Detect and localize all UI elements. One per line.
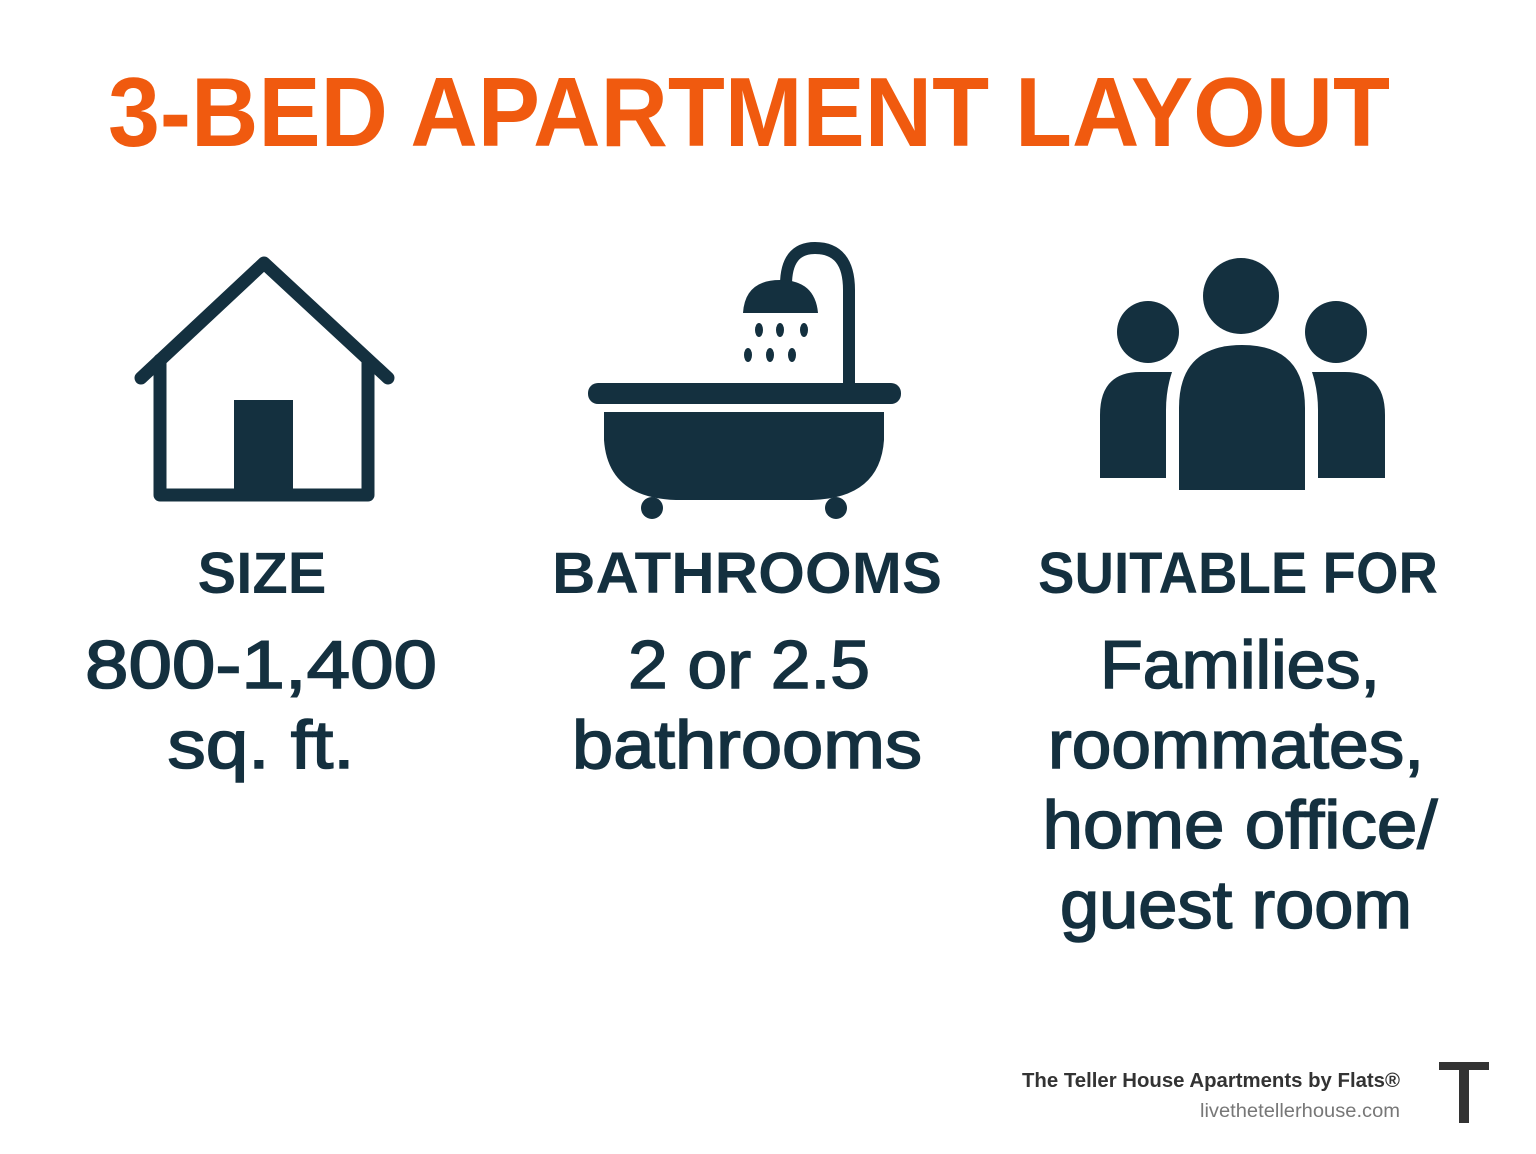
column: bathrooms (552, 541, 942, 783)
column: bathrooms: bathrooms (572, 707, 922, 783)
column: size: 800-1,400 (85, 627, 437, 703)
column: suitable for: SUITABLE FOR (1038, 541, 1438, 606)
column: suitable for: guest room (1060, 867, 1412, 943)
column: bathrooms: BATHROOMS (552, 541, 942, 606)
column: size: SIZE (198, 541, 326, 606)
icon: bathtub (588, 248, 901, 519)
icon: people (1100, 258, 1385, 490)
title: 3-BED APARTMENT LAYOUT (108, 57, 1390, 167)
column: suitable for: Families, (1100, 627, 1380, 703)
footer text: The Teller House Apartments by Flats® (1022, 1070, 1400, 1092)
column: bathrooms: 2 or 2.5 (628, 627, 870, 703)
column: size (85, 541, 437, 783)
column: suitable for: roommates, (1048, 707, 1424, 783)
column: size: sq. ft. (168, 707, 354, 783)
column: suitable for: home office/ (1042, 787, 1438, 863)
column: suitable for (1038, 541, 1438, 943)
footer text (1022, 1070, 1400, 1122)
icon: house (141, 263, 388, 495)
logo: T (1439, 1062, 1489, 1123)
footer text: livethetellerhouse.com (1200, 1101, 1400, 1122)
